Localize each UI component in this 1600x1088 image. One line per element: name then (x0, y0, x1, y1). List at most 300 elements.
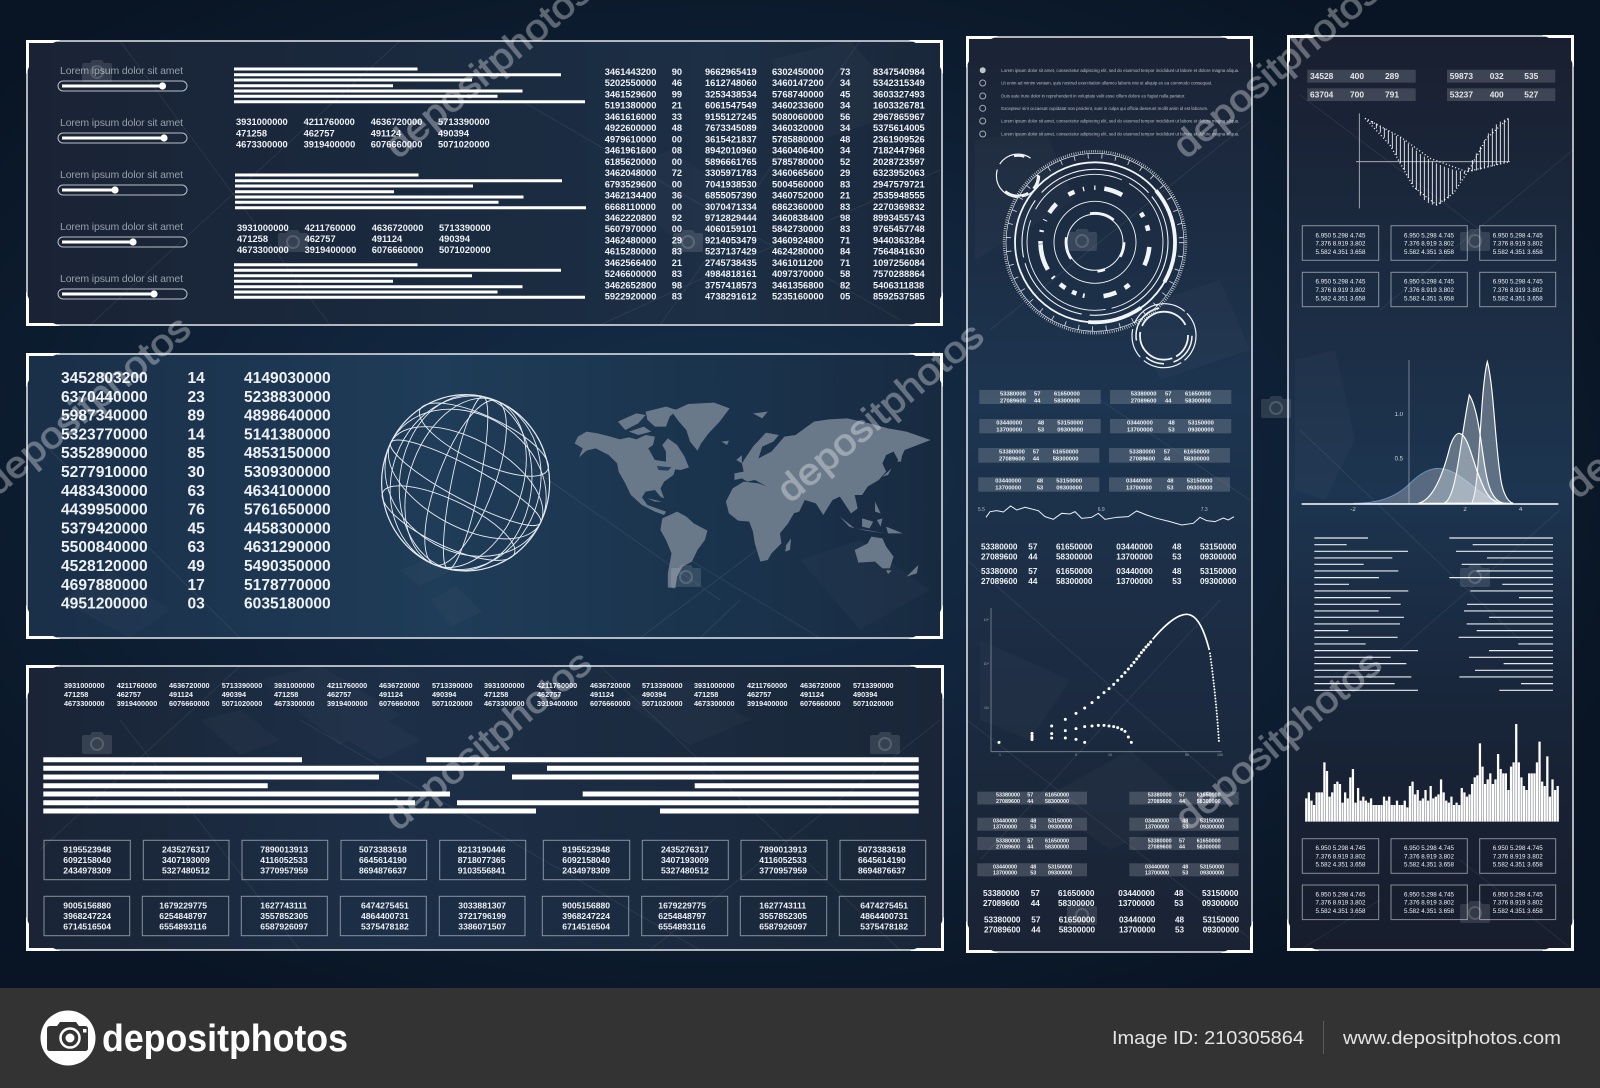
number strip: 462757 (327, 690, 351, 699)
data table: six columns: 00 (672, 179, 682, 189)
data table: six columns: 3460406400 (772, 146, 824, 156)
number boxes: lower row: 3968247224 (562, 911, 610, 921)
gray tables: lower: 53380000 (1148, 793, 1172, 799)
data table: six columns: 2535948555 (873, 190, 925, 200)
number boxes: lower row: 4864400731 (860, 911, 908, 921)
value boxes: lower: 6.950 5.298 4.745 (1493, 845, 1543, 852)
data table: six columns: 3462480000 (605, 236, 656, 246)
data table: six columns: 5080060000 (772, 112, 824, 122)
line chart: sparkline: 7.3 (1201, 507, 1208, 513)
data table: three columns: 89 (188, 408, 205, 425)
data table: six columns: 6668110000 (605, 202, 656, 212)
data table: three columns: 5490350000 (244, 558, 331, 575)
number block: upper: 462757 (304, 129, 335, 139)
data table: six columns: 3615421837 (705, 134, 757, 144)
data table: six columns: 3305971783 (705, 168, 757, 178)
data table: six columns: 8592537585 (873, 292, 925, 302)
number block: bottom: 61650000 (1058, 889, 1095, 898)
number boxes: lower row: 3557852305 (759, 911, 807, 921)
data table: three columns: 17 (188, 577, 205, 594)
number strip: 5713390000 (222, 681, 262, 690)
data table: three columns: 14 (188, 370, 205, 387)
data table: six columns: 3461443200 (605, 67, 656, 77)
gray tables: upper: 48 (1168, 420, 1176, 426)
data table: six columns: 5922920000 (605, 292, 656, 302)
gray stat boxes: 289 (1385, 71, 1399, 81)
data table: three columns: 03 (188, 596, 205, 613)
number block: middle: 58300000 (1056, 577, 1093, 586)
gray tables: lower: 13700000 (1145, 871, 1169, 877)
number block: upper: 490394 (438, 129, 470, 139)
data table: six columns: 3460233600 (772, 101, 824, 111)
bullet list (980, 67, 1239, 137)
data table: three columns (61, 370, 331, 613)
number block: upper: 491124 (371, 129, 402, 139)
data table: three columns: 4853150000 (244, 445, 331, 462)
number block: lower: 471258 (237, 234, 268, 244)
data table: six columns: 83 (672, 292, 682, 302)
slider: five labelled sliders: Lorem ipsum dolor sit amet (60, 169, 183, 181)
gray tables: lower: 53150000 (1200, 864, 1224, 870)
number block: upper: 5713390000 (438, 117, 490, 127)
number boxes: upper row: 8694876637 (858, 865, 906, 875)
data table: six columns: 2270369832 (873, 202, 925, 212)
data table: six columns: 5235160000 (772, 292, 824, 302)
data table: six columns: 4615280000 (605, 247, 656, 257)
number block: bottom: 58300000 (1059, 926, 1096, 935)
number strip: 4211760000 (747, 681, 787, 690)
gray stat boxes: 400 (1490, 90, 1504, 100)
data table: six columns: 1612748060 (705, 78, 757, 88)
number boxes: lower row: 6714516504 (63, 921, 111, 931)
number boxes: lower row: 6474275451 (361, 900, 409, 910)
gray tables: upper: 03440000 (995, 479, 1021, 485)
number strip: 471258 (274, 690, 298, 699)
gray stat boxes: 791 (1385, 90, 1399, 100)
data table: six columns: 5896661765 (705, 157, 757, 167)
number block: bottom: 27089600 (983, 899, 1020, 908)
number block: bottom: 61650000 (1059, 916, 1096, 925)
data table: six columns: 4060159101 (705, 224, 757, 234)
gray tables: upper: 44 (1164, 457, 1171, 463)
gray tables: upper: 03440000 (1127, 420, 1153, 426)
number strip: 4673300000 (64, 699, 105, 708)
gray tables: upper (978, 390, 1231, 492)
gray tables: lower: 53380000 (996, 793, 1020, 799)
number block: lower: 462757 (305, 234, 336, 244)
data table: six columns: 3462652800 (605, 280, 656, 290)
number boxes: lower row: 6554893116 (159, 921, 207, 931)
number strip: 462757 (117, 690, 141, 699)
number block: bottom: 53380000 (984, 916, 1021, 925)
number block: middle: 61650000 (1056, 567, 1093, 576)
data table: six columns: 3460147200 (772, 78, 824, 88)
number block: middle: 13700000 (1116, 577, 1153, 586)
data table: six columns: 4738291612 (705, 292, 757, 302)
number block: upper: 5071020000 (438, 140, 490, 150)
data table: six columns: 00 (672, 224, 682, 234)
scatter chart: 10² (984, 706, 990, 710)
gray tables: upper: 27089600 (1131, 398, 1156, 404)
gray tables: lower: 53150000 (1048, 819, 1072, 825)
slider: five labelled sliders: Lorem ipsum dolor sit amet (60, 273, 183, 285)
gray tables: lower: 27089600 (1148, 845, 1172, 851)
number boxes: lower row: 3386071507 (458, 921, 506, 931)
value boxes: lower: 7.376 8.919 3.802 (1493, 853, 1543, 860)
data table: six columns: 2028723597 (873, 157, 925, 167)
data table: six columns: 9155127245 (705, 112, 757, 122)
number boxes: upper row: 6092158040 (63, 855, 111, 865)
data table: three columns: 4458300000 (244, 520, 331, 537)
value boxes: lower: 5.582 4.351 3.658 (1316, 908, 1366, 915)
scatter chart: 5 (1075, 753, 1077, 757)
number block: bottom: 58300000 (1058, 899, 1095, 908)
density chart: 2 (1463, 507, 1467, 513)
number block: middle: 53150000 (1200, 542, 1237, 551)
data table: six columns: 08 (672, 146, 682, 156)
number block: lower: 5071020000 (439, 245, 491, 255)
number strip: 6076660000 (379, 699, 420, 708)
value boxes: upper: 6.950 5.298 4.745 (1404, 232, 1454, 239)
value boxes: upper: 5.582 4.351 3.658 (1316, 249, 1366, 256)
number block: middle: 09300000 (1200, 552, 1237, 561)
gray tables: lower: 57 (1179, 838, 1185, 844)
gray stat boxes: 032 (1490, 71, 1504, 81)
gray tables: upper: 48 (1167, 479, 1174, 485)
number strip: 491124 (169, 690, 194, 699)
number boxes: lower row: 3033881307 (458, 900, 506, 910)
gray tables: lower: 27089600 (1148, 799, 1172, 805)
gray tables: upper: 57 (1164, 450, 1170, 456)
data table: three columns: 5500840000 (61, 539, 148, 556)
number boxes: upper row: 8213190446 (458, 845, 505, 855)
data table: six columns: 00 (672, 134, 682, 144)
gray stat boxes: 527 (1524, 90, 1539, 100)
icon: wireframe globe (361, 372, 570, 594)
data table: six columns: 34 (840, 123, 851, 133)
value boxes: upper: 5.582 4.351 3.658 (1404, 295, 1455, 302)
number block: lower: 491124 (372, 234, 403, 244)
gray tables: upper: 48 (1037, 479, 1044, 485)
value boxes: lower: 7.376 8.919 3.802 (1316, 900, 1366, 907)
bullet list: Ut enim ad minim veniam, quis nostrud exercitation ullamco laboris nisi ut aliquip ex ea commodo consequat. (1001, 80, 1212, 86)
gray tables: lower: 44 (1179, 845, 1185, 851)
data table: six columns: 98 (840, 213, 850, 223)
line list: right aligned (1449, 538, 1553, 690)
number block: middle: 61650000 (1056, 542, 1093, 551)
gray tables: lower: 09300000 (1200, 825, 1224, 831)
data table: six columns: 6855057390 (705, 190, 757, 200)
data table: six columns: 98 (672, 280, 682, 290)
data table: six columns: 3461529600 (605, 90, 656, 100)
number block: middle: 53150000 (1200, 567, 1237, 576)
number boxes: upper row: 5327480512 (661, 865, 709, 875)
number block: upper: 471258 (236, 129, 267, 139)
value boxes: upper (1302, 226, 1556, 307)
line chart: sparkline: 6.9 (1098, 507, 1105, 513)
data table: three columns: 5323770000 (61, 426, 148, 443)
gray tables: upper: 09300000 (1056, 486, 1082, 492)
icon: HUD dial (982, 130, 1208, 368)
number boxes: upper row: 4116052533 (759, 855, 807, 865)
value boxes: lower: 6.950 5.298 4.745 (1493, 891, 1543, 898)
gray tables: upper: 53150000 (1057, 420, 1083, 426)
data table: six columns: 34 (840, 146, 851, 156)
number block: middle: 09300000 (1200, 577, 1237, 586)
number boxes: upper row: 2434978309 (562, 865, 610, 875)
number strip: 4673300000 (694, 699, 735, 708)
data table: six columns: 6323952063 (873, 168, 925, 178)
number strip: 3919400000 (747, 699, 788, 708)
gray tables: lower: 03440000 (993, 864, 1017, 870)
data table: six columns: 6302450000 (772, 67, 824, 77)
gray tables: upper: 61650000 (1185, 391, 1211, 397)
value boxes: upper: 7.376 8.919 3.802 (1404, 241, 1455, 248)
number strip: 491124 (800, 690, 825, 699)
gray stat boxes: 63704 (1310, 90, 1334, 100)
data table: six columns: 2947579721 (873, 179, 925, 189)
number block: bottom: 48 (1174, 889, 1184, 898)
data table: three columns: 3452803200 (61, 370, 148, 387)
data table: six columns: 3461011200 (772, 258, 823, 268)
data table: six columns: 1603326781 (873, 101, 925, 111)
bullet list: Lorem ipsum dolor sit amet, consectetur adipiscing elit, sed do eiusmod tempor incididunt ut labore et dolore magna aliqua. (1001, 118, 1239, 124)
gray tables: upper: 57 (1033, 450, 1039, 456)
gray tables: lower: 61650000 (1045, 793, 1069, 799)
data table: six columns: 33 (672, 112, 682, 122)
data table: six columns: 5246600000 (605, 269, 656, 279)
data table: six columns: 3460320000 (772, 123, 824, 133)
gray tables: lower: 09300000 (1048, 871, 1072, 877)
number block: lower: 5713390000 (439, 223, 491, 233)
value boxes: upper: 7.376 8.919 3.802 (1493, 287, 1543, 294)
gray stat boxes: 34528 (1310, 71, 1334, 81)
number strip: 3931000000 (64, 681, 105, 690)
data table: six columns: 7182447968 (873, 146, 925, 156)
value boxes: upper: 6.950 5.298 4.745 (1404, 279, 1454, 286)
gray tables: lower: 58300000 (1197, 799, 1221, 805)
data table: three columns: 30 (188, 464, 205, 481)
number block: bottom: 44 (1031, 899, 1040, 908)
number block: middle (981, 542, 1237, 586)
data table: six columns: 21 (840, 190, 850, 200)
data table: six columns: 2745738435 (705, 258, 757, 268)
data table: six columns: 3462220800 (605, 213, 656, 223)
number block: bottom: 44 (1031, 926, 1041, 935)
gray tables: upper: 53 (1168, 427, 1176, 433)
number boxes: upper row: 7890013913 (759, 845, 807, 855)
gray tables: lower: 44 (1179, 799, 1185, 805)
data table: six columns: 83 (672, 247, 682, 257)
data table: six columns: 34 (840, 101, 851, 111)
value boxes: lower: 6.950 5.298 4.745 (1316, 845, 1365, 852)
data table: six columns: 4922600000 (605, 123, 656, 133)
line chart: sparkline (978, 506, 1234, 525)
data table: six columns: 9214053479 (705, 236, 757, 246)
gray tables: upper: 13700000 (996, 427, 1022, 433)
gray tables: upper: 48 (1038, 420, 1045, 426)
data table: three columns: 5141380000 (244, 426, 331, 443)
gray tables: lower: 58300000 (1045, 845, 1069, 851)
data table: six columns: 6793529600 (605, 179, 656, 189)
gray tables: upper: 53 (1167, 486, 1174, 492)
gray tables: lower: 57 (1027, 838, 1033, 844)
gray tables: upper: 53150000 (1188, 420, 1214, 426)
number block: bottom: 53150000 (1203, 916, 1240, 925)
number block: middle: 53 (1172, 577, 1182, 586)
number block: middle: 03440000 (1116, 567, 1153, 576)
number boxes: lower row: 1679229775 (658, 900, 706, 910)
data table: six columns: 3460665600 (772, 168, 824, 178)
data table: six columns: 83 (840, 179, 850, 189)
data table: six columns: 3461961600 (605, 146, 656, 156)
data table: six columns: 7564841630 (873, 247, 925, 257)
value boxes: lower: 7.376 8.919 3.802 (1404, 853, 1455, 860)
data table: six columns: 92 (672, 213, 682, 223)
number boxes: upper row (44, 840, 926, 880)
number strip: 490394 (222, 690, 247, 699)
slider: five labelled sliders: Lorem ipsum dolor sit amet (60, 117, 183, 129)
gray tables: lower: 53380000 (996, 838, 1020, 844)
number block: bottom: 53380000 (983, 889, 1020, 898)
data table: six columns: 8347540984 (873, 67, 926, 77)
gray tables: upper: 27089600 (999, 457, 1025, 463)
data table: six columns: 48 (672, 123, 682, 133)
number block: upper: 6076660000 (371, 140, 422, 150)
gray tables: lower: 57 (1027, 793, 1033, 799)
bullet list: Excepteur sint occaecat cupidatat non proident, sunt in culpa qui officia deserunt mollit anim id est laborum. (1001, 106, 1208, 111)
gray tables: lower: 48 (1030, 864, 1036, 870)
data table: six columns: 2967865967 (873, 112, 925, 122)
world map (575, 403, 931, 588)
data table: six columns: 73 (840, 67, 850, 77)
gray tables: lower: 48 (1182, 864, 1188, 870)
scatter chart: 10⁴ (984, 662, 989, 666)
number boxes: lower row: 6587926097 (260, 921, 308, 931)
data table: six columns: 90 (672, 67, 682, 77)
data table: three columns: 23 (188, 389, 205, 406)
data table: three columns: 4483430000 (61, 483, 148, 500)
scatter chart: 50 (1185, 753, 1189, 757)
gray stat boxes (1307, 70, 1555, 101)
gray tables: lower: 53150000 (1048, 864, 1072, 870)
data table: six columns: 9662965419 (705, 67, 757, 77)
number strip: 4636720000 (169, 681, 210, 690)
data table: six columns: 84 (840, 247, 851, 257)
number boxes: lower row: 4864400731 (361, 911, 409, 921)
data table: three columns: 5309300000 (244, 464, 331, 481)
number boxes: upper row: 2435276317 (162, 845, 210, 855)
gray tables: upper: 58300000 (1184, 457, 1209, 463)
scatter chart: 100 (1217, 753, 1223, 757)
data table: six columns: 5768740000 (772, 90, 824, 100)
value boxes: lower: 5.582 4.351 3.658 (1404, 862, 1455, 869)
value boxes: lower: 5.582 4.351 3.658 (1493, 862, 1543, 869)
data table: six columns: 83 (840, 224, 850, 234)
data table: six columns: 5004560000 (772, 179, 824, 189)
number strip: 490394 (642, 690, 667, 699)
number boxes: lower row: 6474275451 (860, 900, 908, 910)
data table: six columns: 3461616000 (605, 112, 656, 122)
value boxes: lower: 7.376 8.919 3.802 (1493, 900, 1543, 907)
data table: six columns: 3757418573 (705, 280, 757, 290)
data table: six columns: 58 (840, 269, 850, 279)
scatter chart: 10 (1108, 753, 1112, 757)
data table: six columns: 71 (840, 258, 850, 268)
data table: six columns: 5842730000 (772, 224, 824, 234)
data table: three columns: 6370440000 (61, 389, 148, 406)
data table: six columns: 71 (840, 236, 850, 246)
data table: three columns: 5277910000 (61, 464, 148, 481)
gray tables: upper: 57 (1034, 391, 1040, 397)
gray stat boxes: 53237 (1450, 90, 1473, 100)
data table: six columns: 99 (672, 90, 682, 100)
gray tables: lower: 27089600 (996, 799, 1020, 805)
number strip: 5071020000 (853, 699, 894, 708)
data table: six columns: 3603327493 (873, 90, 925, 100)
gray tables: lower: 44 (1027, 799, 1033, 805)
data table: six columns: 52 (840, 157, 850, 167)
density chart: -2 (1350, 507, 1356, 513)
number block: middle: 53380000 (981, 542, 1018, 551)
data table: three columns: 4528120000 (61, 558, 148, 575)
data table: three columns: 85 (188, 445, 205, 462)
gray tables: lower: 61650000 (1197, 793, 1221, 799)
scatter chart: 1 (999, 753, 1001, 757)
number strip: 3931000000 (274, 681, 315, 690)
value boxes: upper: 6.950 5.298 4.745 (1493, 232, 1543, 239)
data table: six columns: 6061547549 (705, 101, 757, 111)
data table: three columns: 14 (188, 426, 205, 443)
gray tables: upper: 58300000 (1053, 457, 1078, 463)
data table: six columns: 21 (672, 258, 682, 268)
number block: bottom: 53 (1174, 899, 1184, 908)
data table: six columns: 4979610000 (605, 134, 656, 144)
gray tables: upper: 61650000 (1054, 391, 1080, 397)
number strip: 3931000000 (694, 681, 735, 690)
number boxes: lower row (44, 896, 925, 936)
number strip: 5071020000 (642, 699, 683, 708)
panel: globe and world map (26, 353, 943, 639)
number strip: 3919400000 (327, 699, 368, 708)
data table: six columns: 6862360000 (772, 202, 824, 212)
data table: six columns: 29 (840, 168, 850, 178)
watermark text (0, 0, 1600, 838)
data table: six columns: 5342315349 (873, 78, 925, 88)
data table: six columns: 4624280000 (772, 247, 824, 257)
value boxes: lower (1302, 839, 1556, 920)
gray tables: lower: 09300000 (1200, 871, 1224, 877)
bullet list: Duis aute irure dolor in reprehenderit in voluptate velit esse cillum dolore eu fugiat nulla pariatur. (1001, 94, 1185, 98)
number boxes: lower row: 1627743111 (260, 900, 307, 910)
number boxes: upper row: 2435276317 (661, 845, 709, 855)
data table: three columns: 4898640000 (244, 408, 331, 425)
gray tables: lower: 61650000 (1045, 838, 1069, 844)
number boxes: upper row: 9103556841 (458, 865, 506, 875)
number boxes: lower row: 3968247224 (63, 911, 111, 921)
number block: lower: 6076660000 (372, 245, 423, 255)
number block: bottom: 27089600 (984, 926, 1021, 935)
gray stat boxes: 400 (1350, 71, 1364, 81)
data table: six columns: 7041938530 (705, 179, 757, 189)
data table: six columns: 5202550000 (605, 78, 656, 88)
number boxes: lower row: 9005156880 (63, 900, 111, 910)
data table: six columns: 9712829444 (705, 213, 758, 223)
number boxes: upper row: 6092158040 (562, 855, 610, 865)
number strip: 5713390000 (642, 681, 683, 690)
value boxes: upper: 7.376 8.919 3.802 (1316, 287, 1366, 294)
number boxes: lower row: 3557852305 (260, 911, 308, 921)
